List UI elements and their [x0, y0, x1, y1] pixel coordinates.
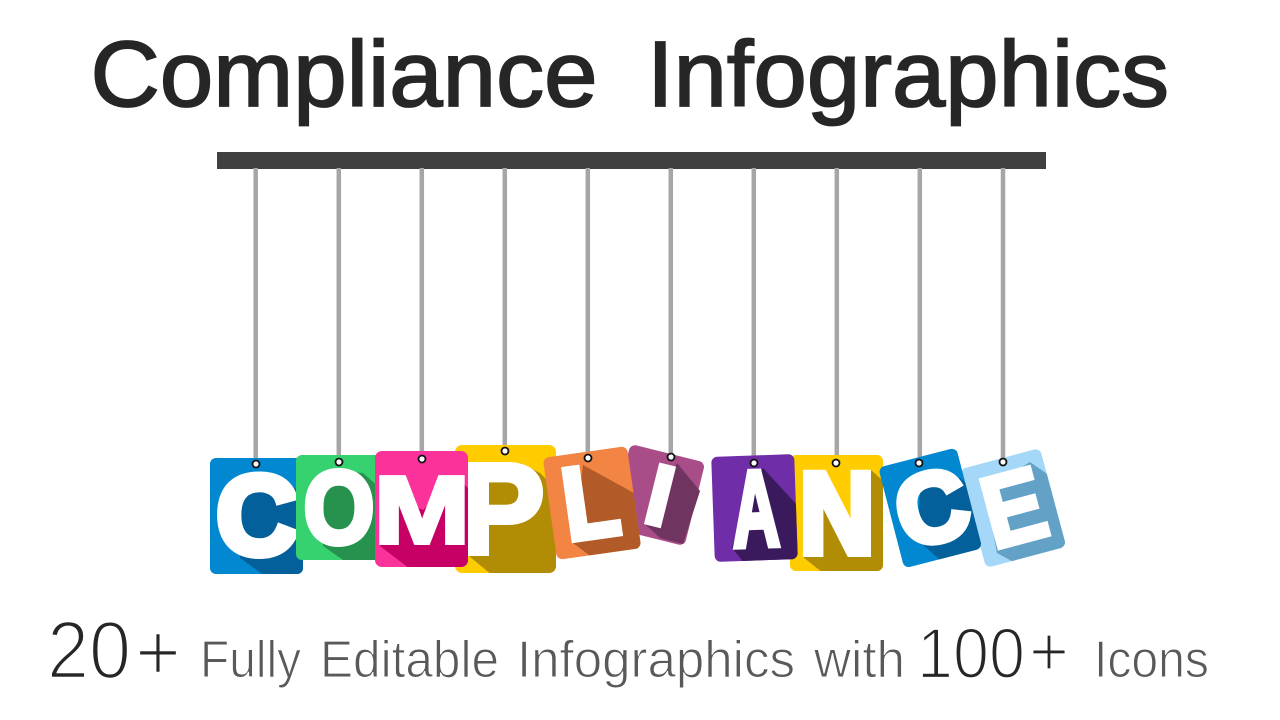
tile: L [544, 446, 640, 560]
tile: A [711, 454, 798, 562]
tagline: + [135, 607, 181, 698]
tile: C: C [217, 453, 297, 578]
tagline: Icons [1094, 631, 1209, 689]
title [90, 22, 1169, 126]
tile: C second: C [884, 445, 980, 570]
tagline: Infographics [517, 631, 795, 689]
tile: I [610, 444, 705, 546]
title: Infographics [647, 22, 1169, 126]
tagline: Fully [200, 631, 301, 689]
tile: L: L [555, 440, 626, 563]
tagline: Editable [320, 631, 499, 689]
tile: A: A [730, 447, 781, 570]
hanging bar [217, 152, 1046, 169]
tile: M: M [374, 457, 470, 564]
tile: I: I [637, 447, 683, 545]
tile: O: O [304, 450, 374, 565]
strings [256, 168, 1003, 462]
tagline [47, 605, 1209, 698]
tagline: 20 [47, 605, 131, 696]
tagline: + [1029, 613, 1069, 692]
tile: E: E [969, 444, 1058, 571]
tile: N: N [800, 450, 874, 578]
tagline: with [813, 631, 905, 689]
tagline: 100 [917, 615, 1025, 694]
title: Compliance [90, 22, 598, 126]
tile: P: P [459, 438, 544, 581]
